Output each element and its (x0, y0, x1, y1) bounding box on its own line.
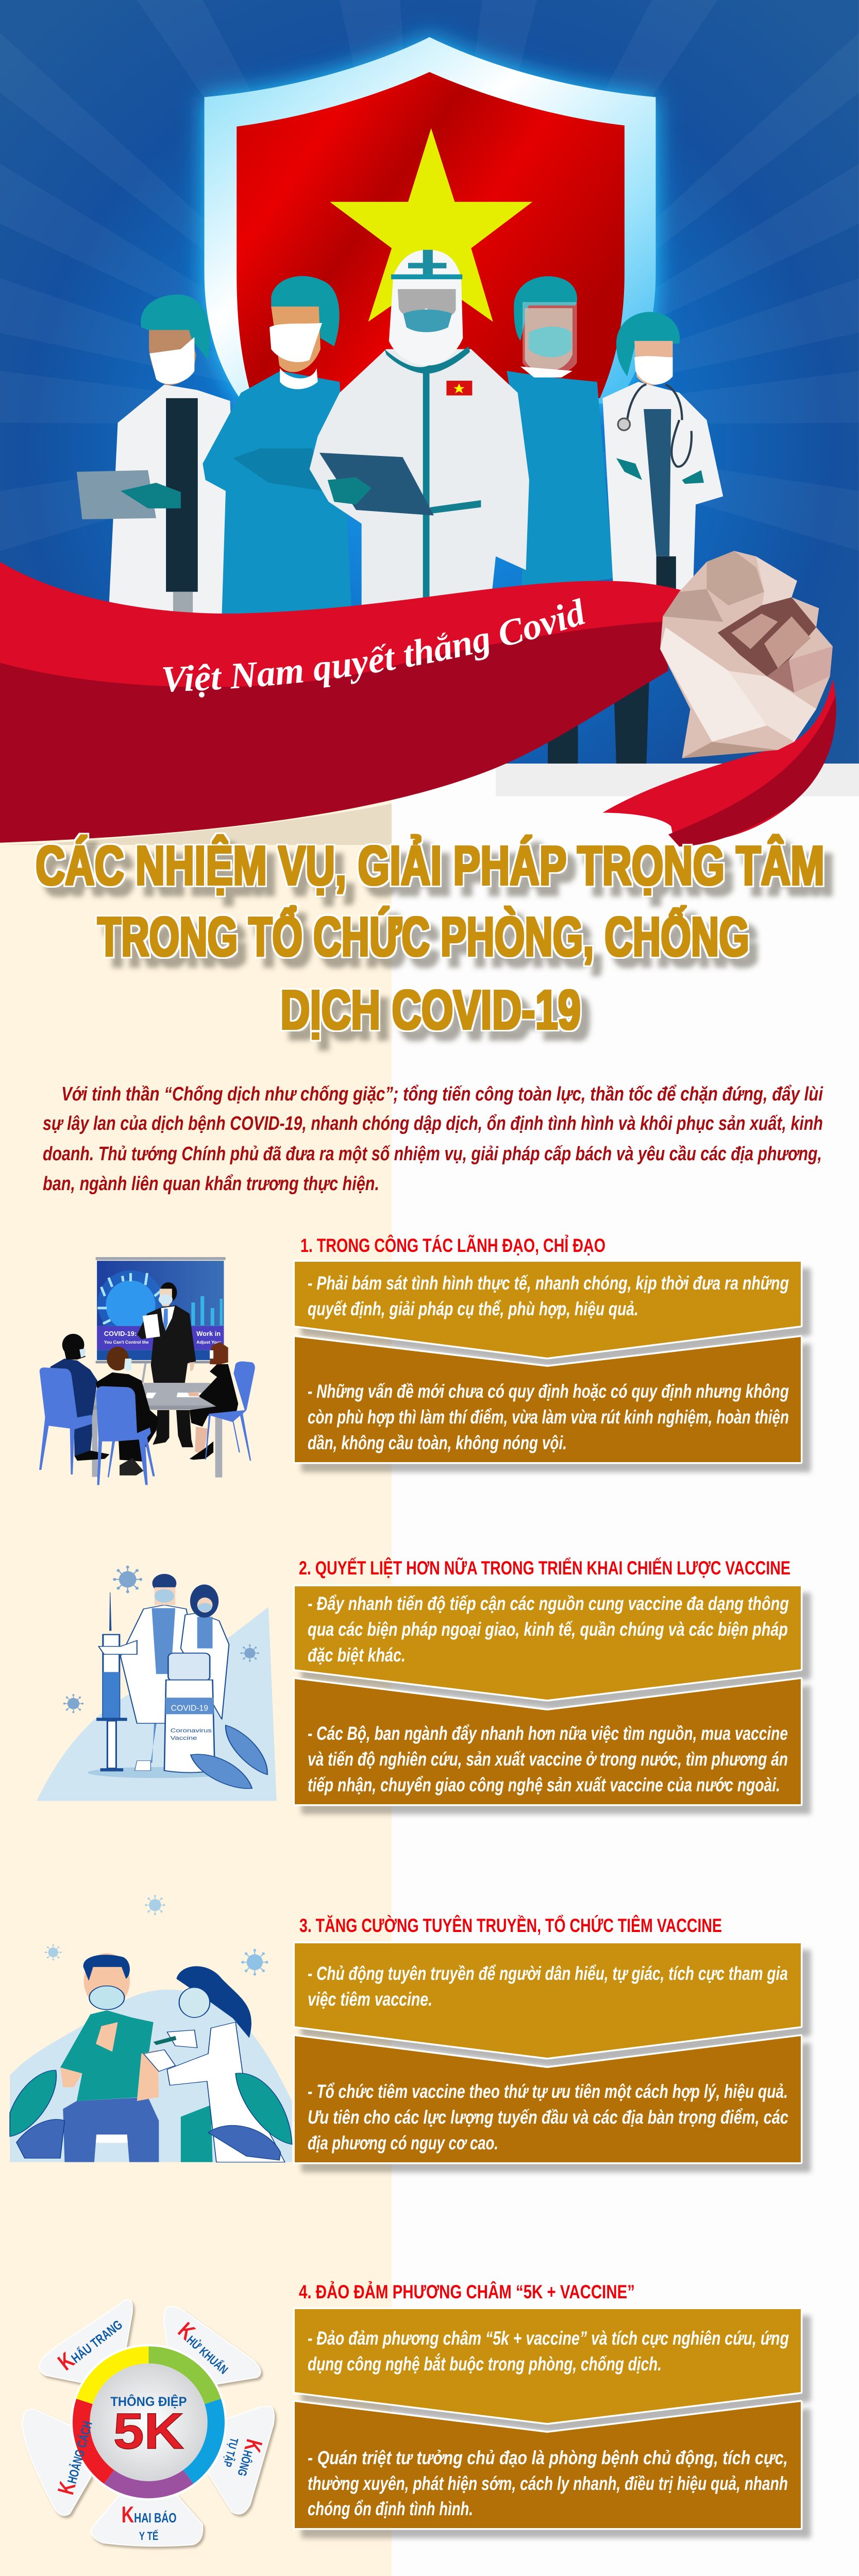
title (36, 834, 824, 1041)
leaves (191, 1725, 267, 1788)
hero illustration (0, 0, 859, 847)
screen text: Work in (196, 1330, 221, 1337)
illustration: meeting (39, 1257, 255, 1485)
petal labels (53, 2311, 267, 2543)
ring (71, 2344, 227, 2500)
screen text: Adjust Your (196, 1340, 222, 1345)
illustration: 5K message (22, 2300, 274, 2546)
screen text (104, 1330, 222, 1345)
virus icons (63, 1566, 259, 1713)
screen text: COVID-19: (104, 1330, 137, 1337)
petal labels: KHẨU TRANG (54, 2311, 127, 2376)
panel 3b (295, 2036, 801, 2162)
syringe (96, 1592, 127, 1771)
table (74, 1383, 238, 1478)
petal labels: KHÔNG (232, 2436, 267, 2480)
flag star (330, 128, 532, 322)
panel 2a: đặc biệt khác. (308, 1645, 406, 1666)
virus icons (45, 1895, 268, 1975)
red ribbon (0, 562, 836, 847)
nurse with face shield (507, 276, 614, 614)
petal labels: KHAI BÁO (122, 2502, 177, 2528)
shield (205, 37, 656, 403)
petal labels: KHOẢNG CÁCH (53, 2417, 97, 2497)
section 4 (22, 2281, 801, 2546)
panel 1b: dần, không cầu toàn, không nóng vội. (308, 1432, 567, 1453)
petal labels: TỤ TẬP (221, 2436, 241, 2468)
section 1 (39, 1234, 801, 1485)
ribbon slogan: Việt Nam quyết thắng Covid (163, 598, 585, 698)
intro paragraph (43, 1083, 823, 1195)
male doctor (98, 1574, 193, 1771)
panel 4a: dụng công nghệ bắt buộc trong phòng, chống dịch. (308, 2353, 662, 2375)
screen text: You Can't Control the (104, 1340, 149, 1345)
heading: 4. ĐẢO ĐẢM PHƯƠNG CHÂM “5K + VACCINE” (299, 2281, 635, 2302)
panel 2a (295, 1586, 801, 1700)
center doctor in protective suit (310, 250, 529, 608)
panel 1a: quyết định, giải pháp cụ thể, phù hợp, hiệu quả. (308, 1298, 638, 1319)
hero white bottom band (496, 764, 859, 796)
patient (60, 1953, 159, 2162)
illustration: vaccine doctors (37, 1566, 277, 1801)
vaccine vial: Coronavirus (171, 1727, 212, 1734)
panel 4a (295, 2309, 801, 2423)
flag badge (446, 381, 472, 396)
5K petals (22, 2300, 274, 2546)
petal labels: KHỬ KHUẨN (173, 2318, 237, 2379)
vaccine vial (164, 1653, 215, 1773)
panel 3a: việc tiêm vaccine. (308, 1989, 432, 2010)
presenter (137, 1282, 196, 1447)
nurse in blue gown (203, 276, 352, 614)
5K center text: THÔNG ĐIỆP (110, 2394, 187, 2409)
ribbon shadow on page (0, 804, 392, 845)
panel 2b (295, 1679, 801, 1804)
illustration: vaccination (10, 1895, 292, 2162)
man in navy suit (39, 1334, 109, 1475)
heading: 3. TĂNG CƯỜNG TUYÊN TRUYỀN, TỔ CHỨC TIÊM VACCINE (299, 1914, 722, 1936)
panel 3b: địa phương có nguy cơ cao. (308, 2132, 498, 2154)
man in black suit (96, 1347, 158, 1485)
vaccine vial: Vaccine (171, 1735, 197, 1741)
panel 1b (295, 1337, 801, 1462)
plants (10, 2070, 292, 2144)
doctor with stethoscope (602, 312, 723, 592)
title: DỊCH COVID-19 (280, 978, 581, 1041)
panel 4b (295, 2402, 801, 2528)
petal labels: Y TẾ (139, 2530, 158, 2543)
clipboard (319, 453, 434, 515)
legs beneath ribbon (548, 682, 649, 764)
heading: 1. TRONG CÔNG TÁC LÃNH ĐẠO, CHỈ ĐẠO (300, 1234, 605, 1256)
fist (660, 551, 833, 758)
panel 3a (295, 1943, 801, 2058)
intro paragraph: ban, ngành liên quan khẩn trương thực hiện. (43, 1173, 379, 1195)
panel 4b: chóng ổn định tình hình. (308, 2498, 473, 2519)
vial label: COVID-19 (171, 1703, 208, 1713)
woman (188, 1342, 255, 1461)
section 3 (10, 1895, 801, 2162)
5K center text: 5K (113, 2403, 184, 2460)
doctor with tablet (77, 295, 238, 616)
hero blue sunburst background (0, 0, 859, 764)
section 2 (37, 1557, 801, 1804)
nurse (144, 1966, 285, 2162)
female doctor (181, 1585, 229, 1719)
panel 1a (295, 1262, 801, 1358)
